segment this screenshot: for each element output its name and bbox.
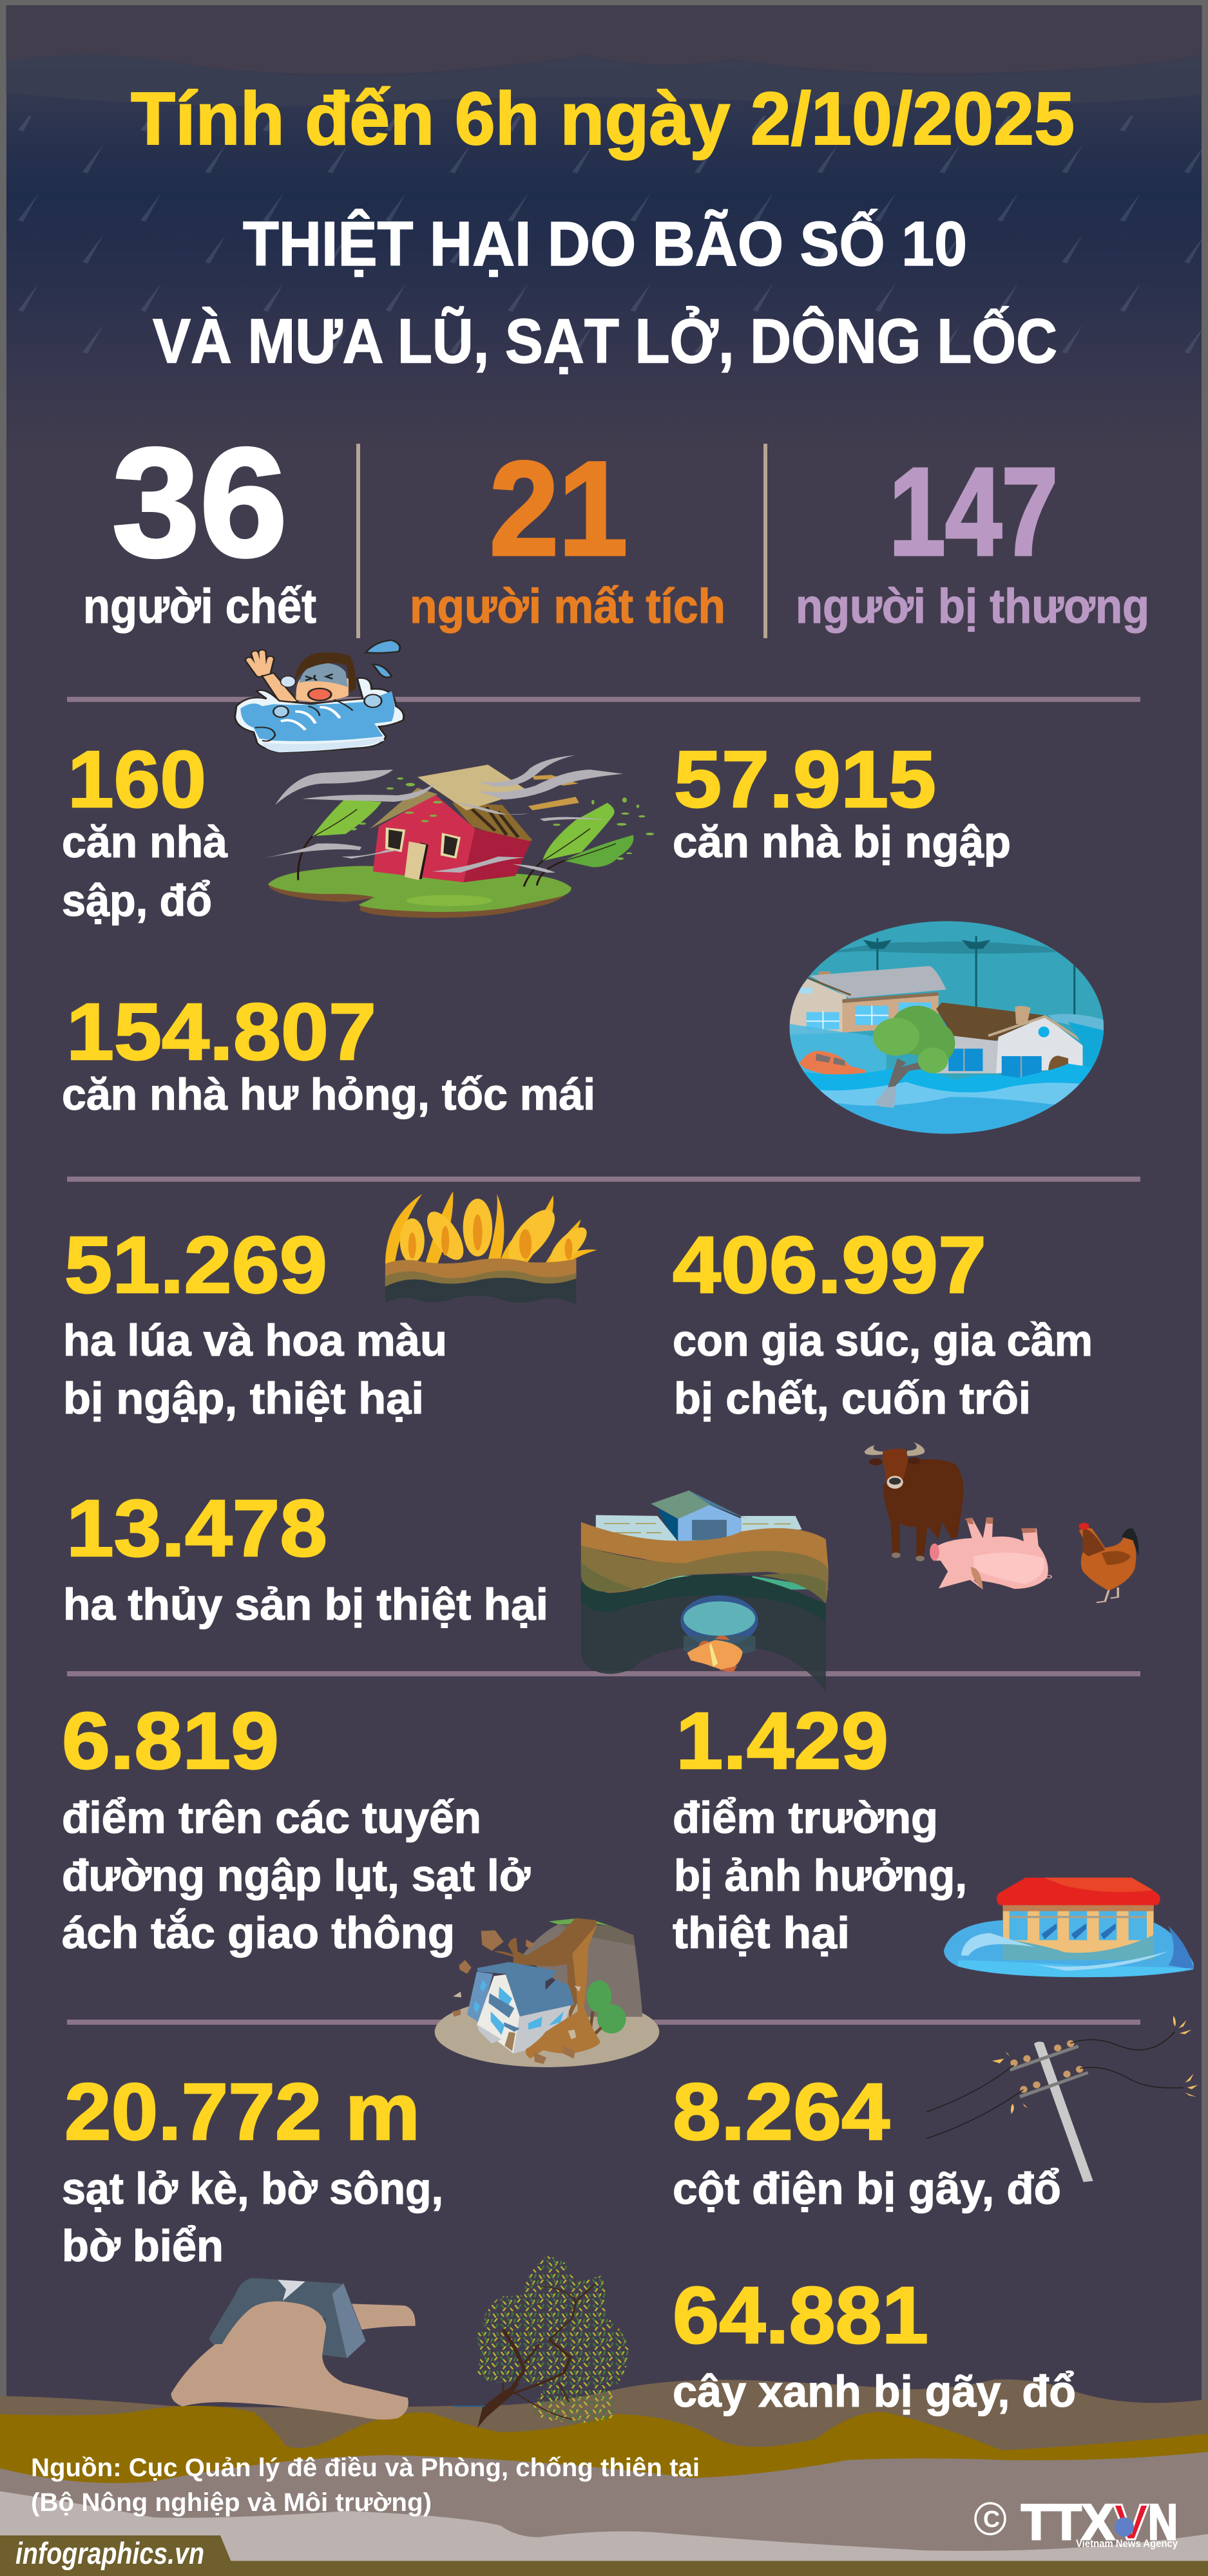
icon: flooded houses bbox=[787, 919, 1106, 1140]
stat: căn nhà sập đổ bbox=[62, 735, 228, 925]
stat: điểm trường bbox=[673, 1696, 967, 1958]
stat: người mất tích: 21 bbox=[490, 434, 628, 583]
stat: căn nhà hư hỏng: 154.807 bbox=[66, 987, 376, 1077]
stat: căn nhà bị ngập bbox=[673, 735, 1011, 867]
stat: ha lúa và hoa màu: ha lúa và hoa màu bbox=[63, 1316, 447, 1365]
stat: cây xanh: 64.881 bbox=[673, 2271, 928, 2360]
source note bbox=[31, 2454, 700, 2517]
stat: người chết: người chết bbox=[83, 579, 316, 633]
stat: điểm trường: bị ảnh hưởng, bbox=[674, 1851, 967, 1900]
icon: landslide bbox=[435, 1918, 659, 2067]
logo: TTXVN bbox=[975, 2494, 1178, 2550]
source note: Nguồn: Cục Quản lý đê điều và Phòng, chống thiên tai bbox=[31, 2454, 700, 2482]
icon: flooded school bbox=[944, 1878, 1194, 1977]
icon: house in storm bbox=[264, 755, 654, 918]
stat: cây xanh: cây xanh bị gãy, đổ bbox=[673, 2367, 1076, 2416]
icon: collapsed embankment bbox=[171, 2278, 416, 2420]
heading: THIỆT HẠI DO BÃO SỐ 10 bbox=[243, 209, 967, 279]
stat: sạt lở kè: bờ biển bbox=[62, 2221, 224, 2271]
icon: wheat field bbox=[385, 1191, 597, 1305]
stat: cây xanh bbox=[673, 2271, 1076, 2416]
stat: người chết bbox=[83, 416, 316, 633]
stat: ha thủy sản: 13.478 bbox=[66, 1484, 327, 1573]
stat: cột điện: cột điện bị gãy, đổ bbox=[673, 2164, 1061, 2213]
stat: điểm trường: 1.429 bbox=[676, 1696, 888, 1786]
stat: con gia súc, gia cầm: con gia súc, gia cầm bbox=[673, 1316, 1093, 1365]
logo: TTXVN: N bbox=[1148, 2494, 1178, 2550]
ground layers bbox=[0, 2380, 1208, 2576]
stat: con gia súc, gia cầm: 406.997 bbox=[673, 1220, 986, 1310]
stat: điểm trên các tuyến đường: 6.819 bbox=[62, 1696, 279, 1786]
stat: ha lúa và hoa màu: 51.269 bbox=[64, 1220, 327, 1310]
logo: TTXVN: TTX bbox=[1021, 2494, 1115, 2550]
stat: sạt lở kè: 20.772 m bbox=[64, 2067, 420, 2157]
icon: drowning person bbox=[235, 640, 404, 752]
stat: điểm trên các tuyến đường: ách tắc giao thông bbox=[62, 1908, 455, 1958]
stat: người mất tích: người mất tích bbox=[410, 579, 725, 633]
stat: ha lúa và hoa màu bbox=[63, 1220, 447, 1423]
stat: ha lúa và hoa màu: bị ngập, thiệt hại bbox=[63, 1374, 424, 1423]
stat: con gia súc, gia cầm bbox=[673, 1220, 1093, 1423]
logo: TTXVN: C bbox=[983, 2506, 1000, 2532]
stat: căn nhà hư hỏng: căn nhà hư hỏng, tốc mái bbox=[62, 1070, 595, 1119]
heading: VÀ MƯA LŨ, SẠT LỞ, DÔNG LỐC bbox=[153, 306, 1057, 376]
source note: (Bộ Nông nghiệp và Môi trường) bbox=[31, 2488, 432, 2517]
stat: căn nhà bị ngập: căn nhà bị ngập bbox=[673, 817, 1011, 867]
logo: TTXVN: V bbox=[1113, 2494, 1149, 2550]
stat: điểm trường: thiệt hại bbox=[673, 1908, 850, 1958]
stat: ha thủy sản bbox=[63, 1484, 548, 1629]
icon: fallen tree bbox=[454, 2256, 629, 2428]
stat: điểm trên các tuyến đường: điểm trên các tuyến bbox=[62, 1793, 481, 1842]
stat: người bị thương: 147 bbox=[889, 442, 1058, 581]
stat: điểm trên các tuyến đường: đường ngập lụt, sạt lở bbox=[62, 1851, 531, 1900]
stat: căn nhà hư hỏng bbox=[62, 987, 595, 1119]
stat: cột điện bbox=[673, 2067, 1061, 2213]
stat: điểm trường: điểm trường bbox=[673, 1793, 938, 1842]
heading bbox=[153, 209, 1057, 376]
stat: điểm trên các tuyến đường bbox=[62, 1696, 531, 1958]
stat: người bị thương bbox=[796, 442, 1149, 633]
title: date: Tính đến 6h ngày 2/10/2025 bbox=[131, 77, 1075, 160]
stat: con gia súc, gia cầm: bị chết, cuốn trôi bbox=[674, 1374, 1031, 1423]
website tag: infographics.vn bbox=[15, 2536, 204, 2570]
stat: căn nhà sập đổ: sập, đổ bbox=[62, 876, 212, 925]
icon: broken power pole bbox=[926, 2016, 1198, 2182]
stat: căn nhà bị ngập: 57.915 bbox=[674, 735, 936, 824]
logo: TTXVN: Vietnam News Agency bbox=[1076, 2537, 1178, 2550]
stat: người mất tích bbox=[410, 434, 725, 633]
stat: cột điện: 8.264 bbox=[673, 2067, 890, 2157]
stat: căn nhà sập đổ: căn nhà bbox=[62, 817, 228, 867]
icon: livestock bbox=[865, 1442, 1138, 1602]
icon: aquaculture pond bbox=[581, 1490, 830, 1692]
stat: người chết: 36 bbox=[112, 416, 287, 589]
stat: ha thủy sản: ha thủy sản bị thiệt hại bbox=[63, 1580, 548, 1629]
stat: căn nhà sập đổ: 160 bbox=[68, 735, 206, 824]
stat: sạt lở kè bbox=[62, 2067, 443, 2271]
stat: người bị thương: người bị thương bbox=[796, 579, 1149, 633]
stat: sạt lở kè: sạt lở kè, bờ sông, bbox=[62, 2164, 443, 2213]
